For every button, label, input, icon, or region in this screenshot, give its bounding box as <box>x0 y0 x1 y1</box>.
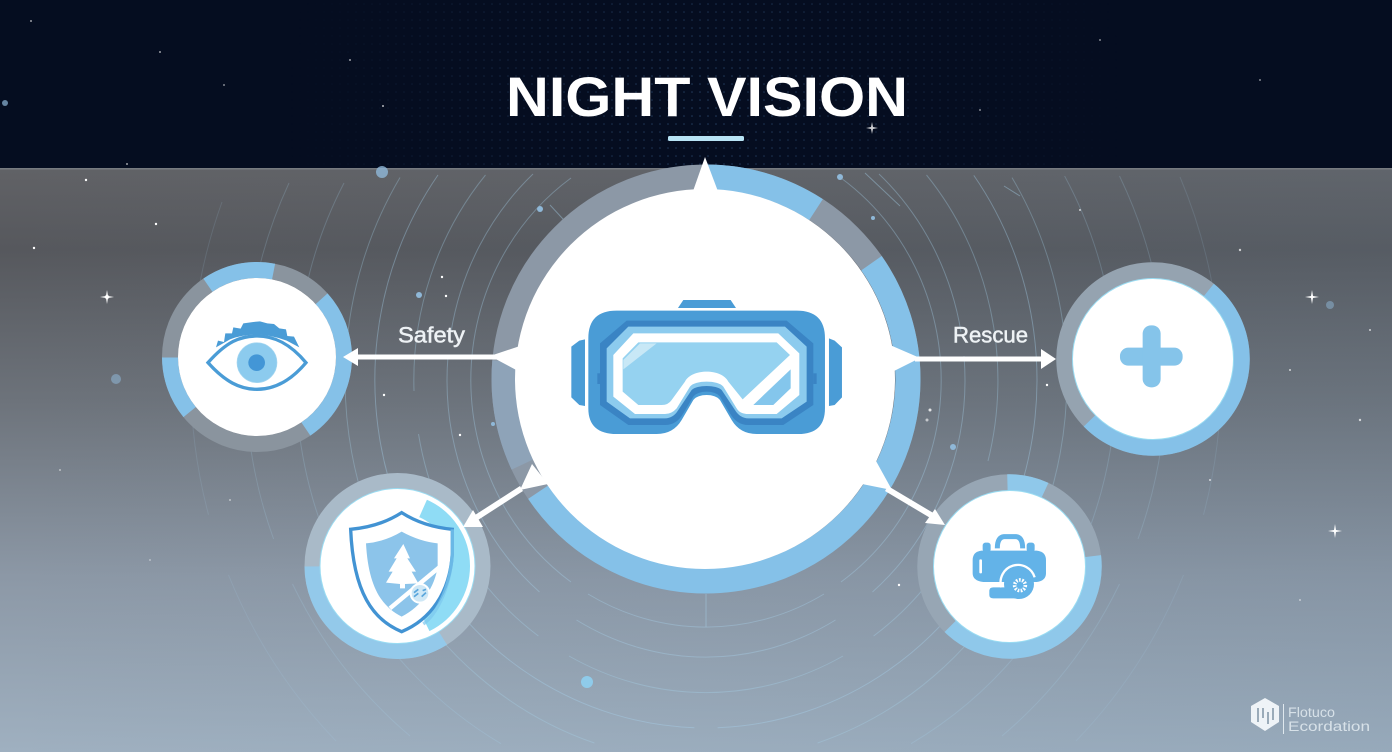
icon: medical cross <box>1120 325 1183 387</box>
logo text line 1: Flotuco <box>1288 705 1335 720</box>
label: Safety: Safety <box>398 322 465 348</box>
title: NIGHT VISION <box>506 65 908 128</box>
arrow: to shield <box>463 486 523 527</box>
eye ring <box>170 270 344 444</box>
arrow: to Safety <box>343 348 497 366</box>
rescue ring <box>1064 270 1242 448</box>
background: lower gradient panel <box>0 168 1392 752</box>
title underline <box>668 136 744 141</box>
icon: eye <box>208 321 306 389</box>
arrow: to equipment <box>885 486 945 525</box>
central white disc with pointers <box>490 157 920 569</box>
node: plus <box>1064 270 1242 448</box>
icon: night vision goggles <box>571 300 842 434</box>
logo text line 2: Ecordation <box>1288 719 1370 734</box>
central ring <box>504 177 908 581</box>
arrow: to Rescue <box>915 349 1056 369</box>
shield ring <box>312 481 482 651</box>
label: Rescue: Rescue <box>953 322 1028 348</box>
node: camera bag <box>926 482 1094 650</box>
icon: hexagon logo <box>1251 698 1279 731</box>
cyan highlight band <box>334 503 460 629</box>
icon: shield with tree <box>351 513 452 632</box>
camera ring <box>926 482 1094 650</box>
node: eye <box>170 270 344 444</box>
node: shield <box>312 481 482 651</box>
header band <box>0 0 1392 170</box>
icon: rescue equipment case <box>973 537 1046 599</box>
logo <box>1251 698 1370 734</box>
concentric radar arcs <box>191 173 1221 744</box>
